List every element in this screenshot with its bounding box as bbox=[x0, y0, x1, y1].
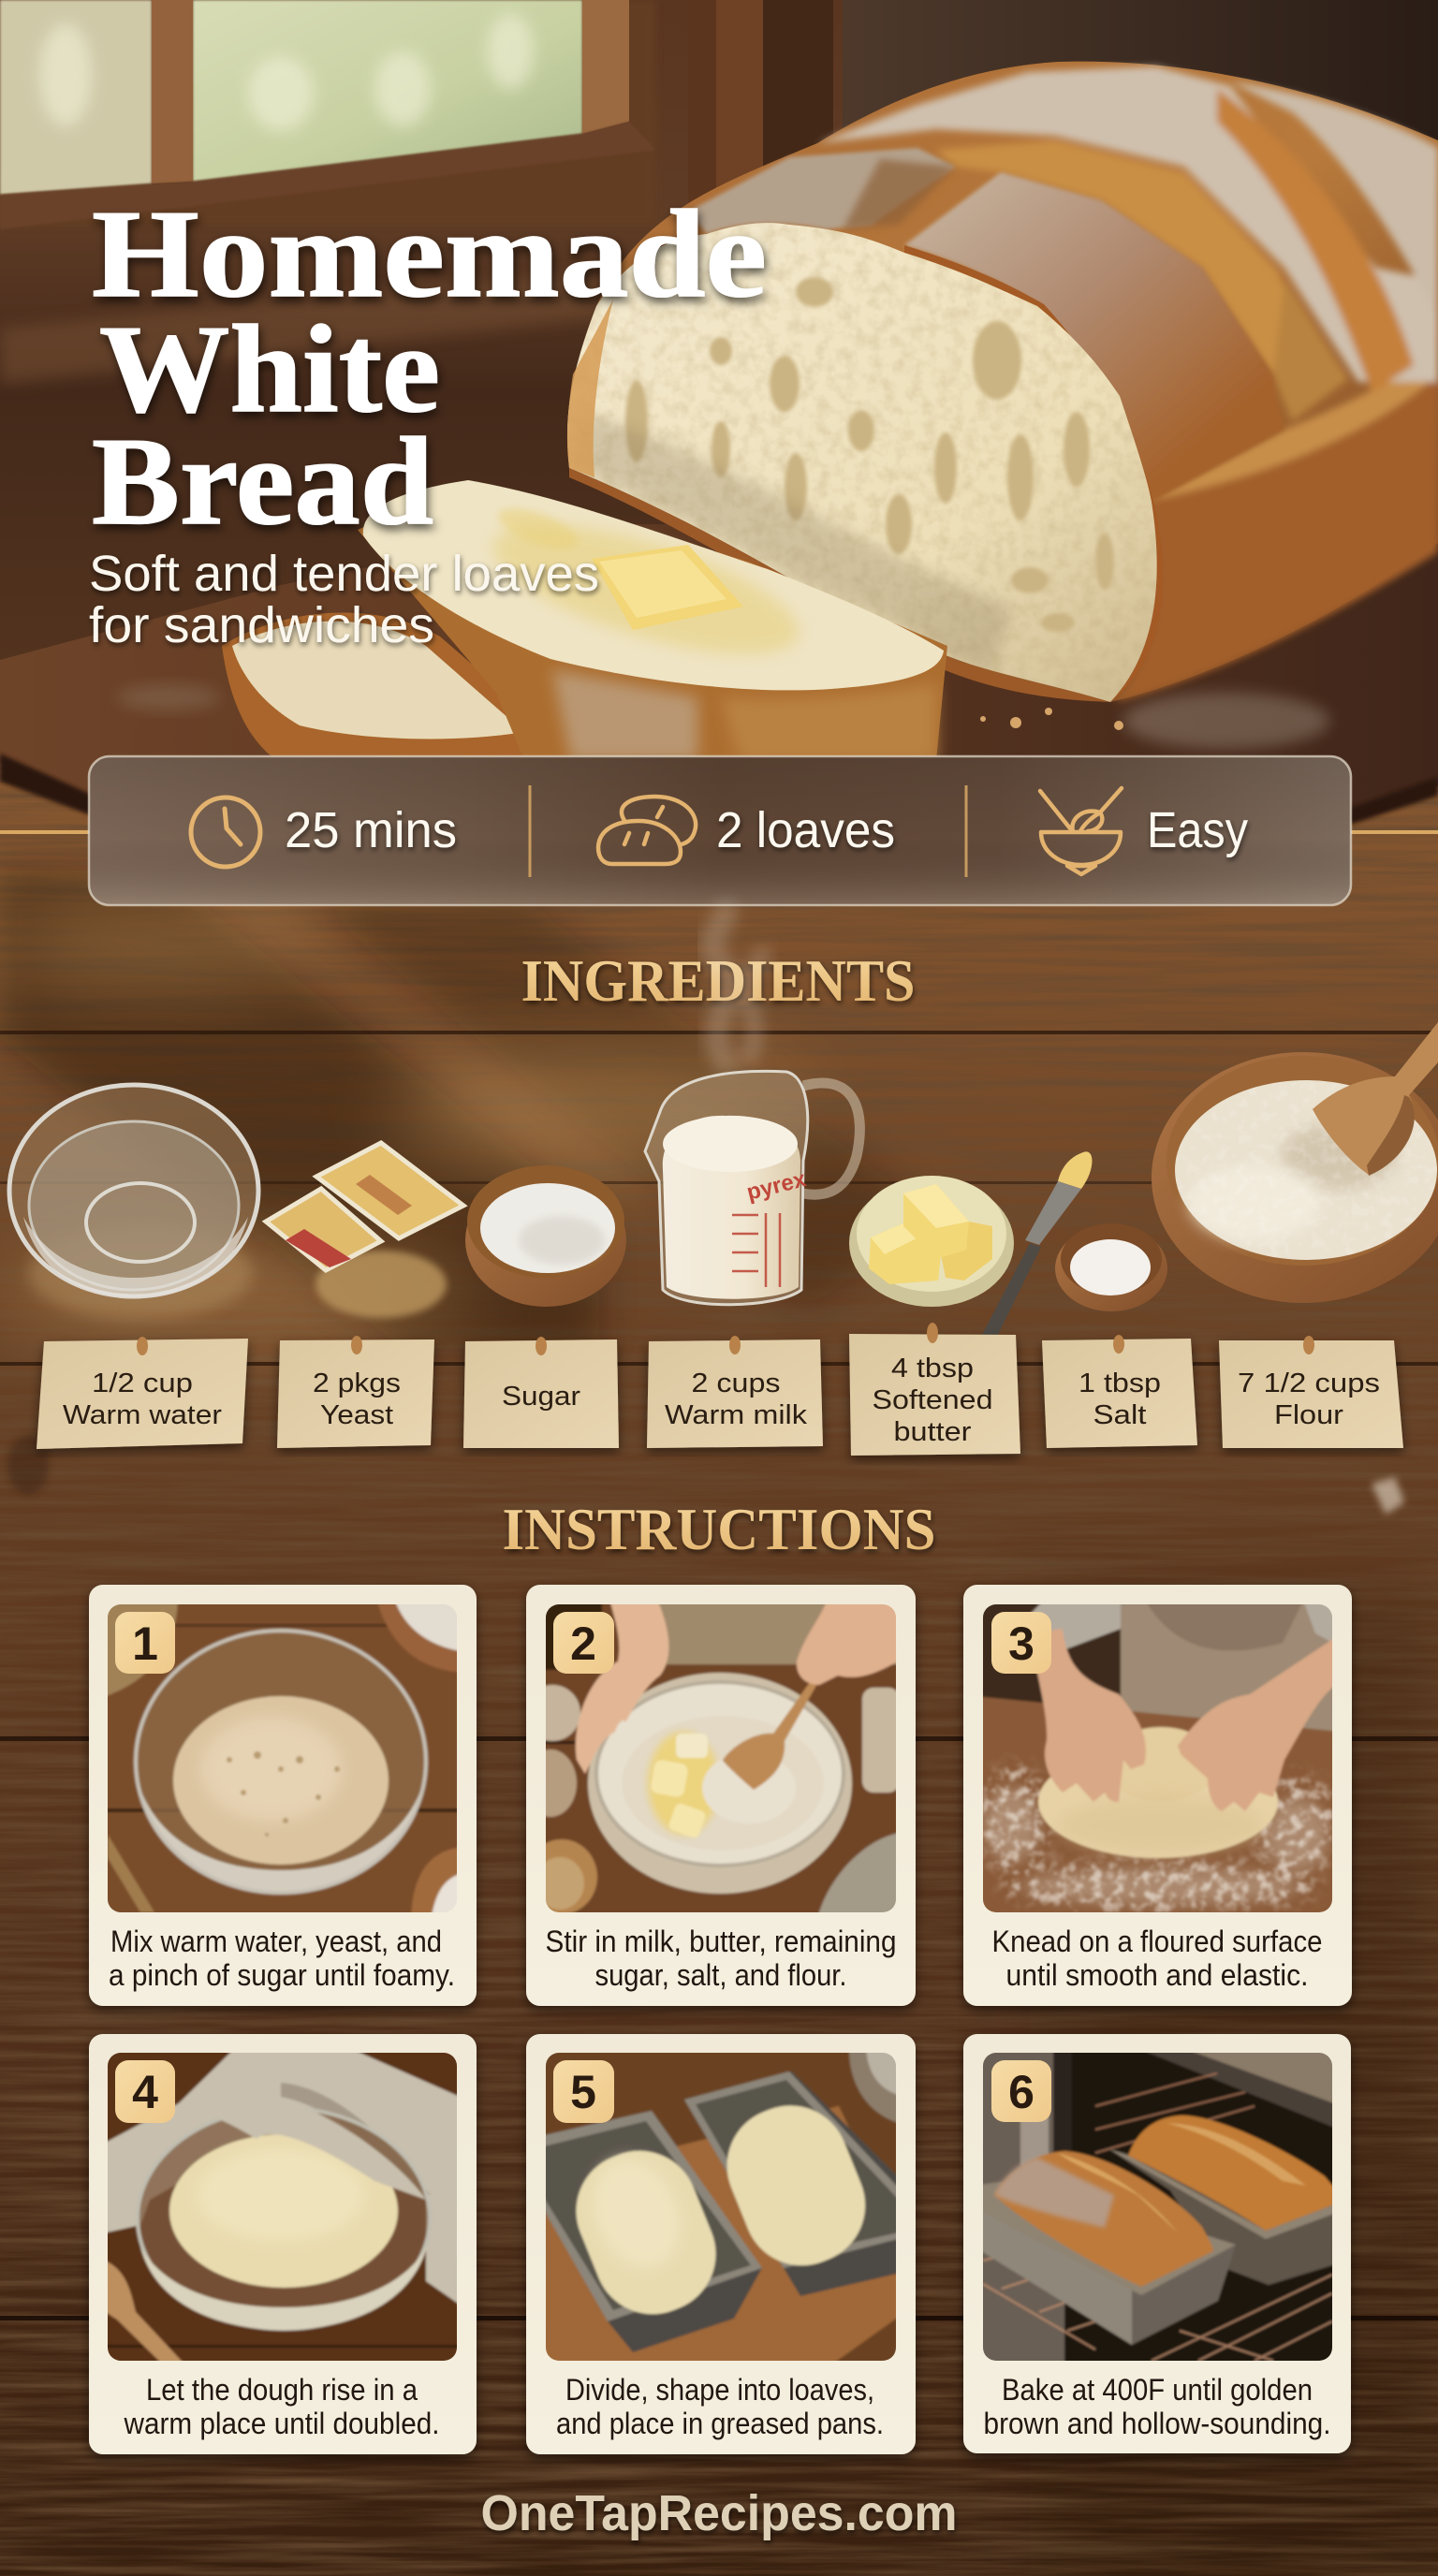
step 1 text: a pinch of sugar until foamy. bbox=[109, 1958, 455, 1992]
title: Bread bbox=[92, 412, 433, 550]
tag text: 4 tbsp bbox=[891, 1354, 974, 1383]
step 3 photo: kneading dough bbox=[983, 1604, 1332, 1912]
step 4 text: warm place until doubled. bbox=[124, 2407, 440, 2440]
subtitle: for sandwiches bbox=[89, 597, 434, 653]
step 2 badge: 2 bbox=[570, 1617, 596, 1670]
pin bbox=[137, 1337, 148, 1355]
stats bar bbox=[89, 756, 1351, 905]
hero photo: sliced bread with butter bbox=[222, 480, 947, 760]
step 4 badge: 4 bbox=[132, 2066, 158, 2118]
step 3 card bbox=[963, 1585, 1352, 2006]
title bbox=[92, 184, 767, 550]
step 3 text bbox=[992, 1925, 1322, 1992]
step 1 text: Mix warm water, yeast, and bbox=[110, 1925, 442, 1958]
ingredient tag: flour bbox=[1219, 1336, 1403, 1448]
tag text bbox=[665, 1368, 808, 1430]
pin bbox=[1113, 1335, 1124, 1354]
step 6 badge bbox=[991, 2060, 1051, 2122]
tag text: 2 cups bbox=[691, 1368, 781, 1398]
pin bbox=[351, 1336, 362, 1354]
ingredient: milk measuring jug bbox=[645, 1071, 859, 1305]
step 1 badge bbox=[115, 1612, 175, 1674]
hero photo: window background bbox=[0, 0, 1438, 711]
tag text bbox=[1238, 1368, 1380, 1430]
tag text bbox=[313, 1368, 401, 1430]
step 3 text: until smooth and elastic. bbox=[1005, 1958, 1309, 1992]
icon: clock bbox=[191, 798, 260, 867]
ingredient tag: warm water bbox=[37, 1337, 248, 1449]
step 4 text: Let the dough rise in a bbox=[146, 2373, 418, 2407]
ingredient tag: yeast bbox=[277, 1336, 434, 1448]
ingredient: salt bowl bbox=[1055, 1223, 1167, 1311]
pin bbox=[927, 1323, 938, 1343]
tag text: 1/2 cup bbox=[92, 1368, 193, 1398]
step 1 card bbox=[89, 1585, 477, 2006]
tag text bbox=[63, 1368, 222, 1430]
tag text: Softened bbox=[873, 1385, 992, 1415]
ingredient: flour bowl with scoop bbox=[1152, 1022, 1438, 1303]
gold divider left bbox=[0, 830, 89, 834]
step 5 text: and place in greased pans. bbox=[556, 2407, 884, 2440]
step 4 photo: dough rising under towel bbox=[98, 2043, 466, 2370]
step 2 text bbox=[545, 1925, 897, 1992]
ingredient tag: sugar bbox=[463, 1337, 619, 1448]
icon: whisk and bowl bbox=[1040, 788, 1122, 874]
tag text: Sugar bbox=[502, 1382, 580, 1412]
heading: instructions: INSTRUCTIONS bbox=[502, 1496, 936, 1562]
step 5 badge: 5 bbox=[570, 2066, 596, 2118]
step 3 badge bbox=[991, 1612, 1051, 1674]
jug label: pyrex bbox=[744, 1166, 809, 1206]
subtitle bbox=[89, 546, 599, 653]
steam bbox=[712, 913, 763, 1062]
ingredient: butter knife bbox=[980, 1151, 1093, 1350]
ingredient tag: milk bbox=[647, 1336, 823, 1448]
tag text: Warm milk bbox=[665, 1400, 808, 1430]
tag text bbox=[1078, 1368, 1161, 1430]
icon: bread loaves bbox=[598, 797, 696, 864]
tag text bbox=[873, 1354, 992, 1447]
ingredient tag: salt bbox=[1042, 1335, 1197, 1448]
loaves text: 2 loaves bbox=[716, 802, 895, 858]
step 6 text: Bake at 400F until golden bbox=[1002, 2373, 1313, 2407]
step 2 card bbox=[524, 1585, 916, 2006]
step 2 text: Stir in milk, butter, remaining bbox=[545, 1925, 897, 1958]
heading: ingredients: INGREDIENTS bbox=[521, 947, 916, 1014]
tag text: Salt bbox=[1093, 1400, 1146, 1430]
step 3 text: Knead on a floured surface bbox=[992, 1925, 1322, 1958]
ingredient: butter bowl bbox=[849, 1176, 1014, 1307]
step 6 text: brown and hollow-sounding. bbox=[983, 2407, 1331, 2440]
gold divider right bbox=[1351, 830, 1438, 834]
step 2 badge bbox=[553, 1612, 614, 1674]
step 1 text bbox=[109, 1925, 455, 1992]
step 1 badge: 1 bbox=[132, 1617, 158, 1670]
step 1 photo: foamy yeast in glass bowl bbox=[108, 1604, 457, 1912]
tag text: butter bbox=[893, 1417, 972, 1447]
tag text: Warm water bbox=[63, 1400, 222, 1430]
step 5 photo: loaves in pans bbox=[536, 2043, 905, 2370]
pin bbox=[1303, 1336, 1314, 1354]
step 3 badge: 3 bbox=[1008, 1617, 1034, 1670]
title: White bbox=[99, 300, 440, 438]
pin bbox=[729, 1336, 741, 1354]
step 5 badge bbox=[553, 2060, 614, 2123]
tag text: 7 1/2 cups bbox=[1238, 1368, 1380, 1398]
step 6 badge: 6 bbox=[1008, 2066, 1034, 2118]
tag text: 2 pkgs bbox=[313, 1368, 401, 1398]
tag text: Yeast bbox=[320, 1400, 393, 1430]
step 5 card bbox=[526, 2034, 916, 2454]
pin bbox=[536, 1337, 547, 1355]
ingredient: glass bowl of water bbox=[9, 1085, 258, 1320]
difficulty text: Easy bbox=[1147, 802, 1248, 858]
time text: 25 mins bbox=[285, 802, 457, 858]
step 2 photo: mixing flour and butter bbox=[546, 1604, 896, 1912]
hero photo: bread loaf bbox=[562, 62, 1438, 711]
subtitle: Soft and tender loaves bbox=[89, 546, 599, 602]
step 4 card bbox=[89, 2034, 477, 2454]
step 4 badge bbox=[115, 2060, 175, 2123]
step 6 photo: loaves baking in oven bbox=[974, 2043, 1342, 2370]
step 2 text: sugar, salt, and flour. bbox=[595, 1958, 846, 1992]
step 5 text bbox=[556, 2373, 884, 2440]
tag text: 1 tbsp bbox=[1078, 1368, 1161, 1398]
step 5 text: Divide, shape into loaves, bbox=[565, 2373, 874, 2407]
tag text: Flour bbox=[1274, 1400, 1343, 1430]
hero photo: cutting board bbox=[0, 524, 1438, 828]
ingredient: sugar bowl bbox=[465, 1165, 626, 1307]
ingredient tag: butter bbox=[849, 1323, 1020, 1456]
title: Homemade bbox=[92, 184, 767, 323]
step 6 text bbox=[983, 2373, 1331, 2440]
ingredient: yeast packets bbox=[266, 1143, 463, 1318]
footer website: OneTapRecipes.com bbox=[481, 2485, 957, 2541]
step 4 text bbox=[124, 2373, 440, 2440]
step 6 card bbox=[963, 2034, 1351, 2453]
